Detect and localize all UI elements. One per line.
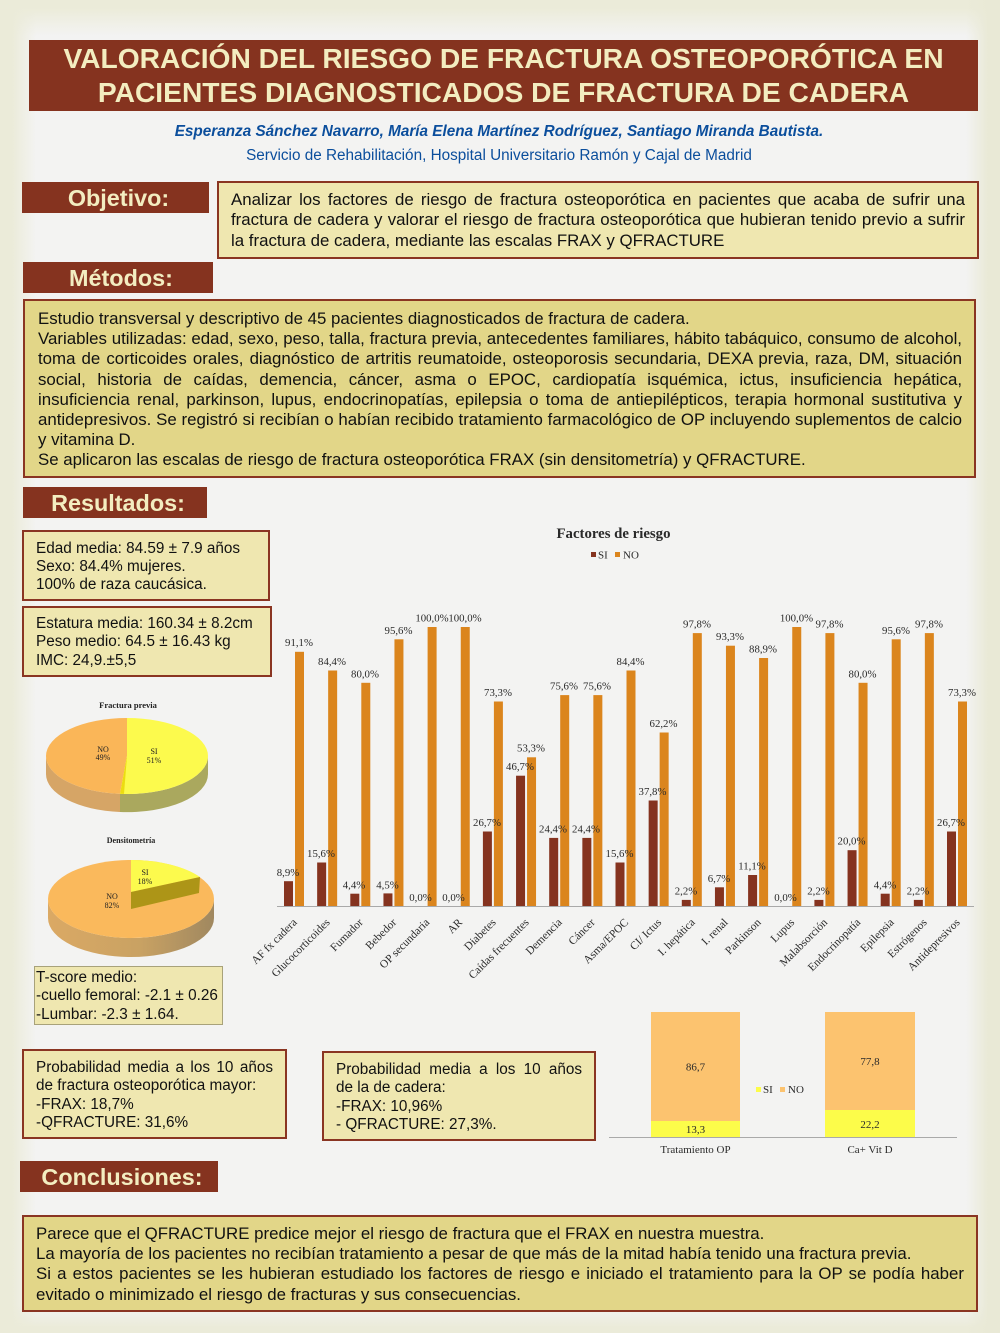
value labels NO: 95,6%: [385, 625, 412, 637]
category labels: [249, 916, 963, 982]
pie side: [48, 899, 214, 957]
stacked bar chart: tratamiento: [609, 1012, 957, 1156]
panel: probabilidad fractura cadera: de la de cadera:: [336, 1079, 446, 1096]
legend: NO: [788, 1084, 804, 1096]
panel: probabilidad fractura mayor: [22, 1049, 287, 1139]
pie chart: densitometría: [48, 836, 214, 957]
category labels: Asma/EPOC: [581, 917, 631, 966]
panel: métodos: insuficiencia renal, parkinson, lupus, endocrinopatías, epilepsia o toma de antiepilépticos, terapia hormonal sustitutiva y: [38, 390, 962, 409]
value labels NO: 97,8%: [915, 618, 943, 630]
panel: probabilidad fractura mayor: -QFRACTURE: 31,6%: [36, 1114, 188, 1131]
slice: SI: [120, 718, 208, 794]
pie labels: SI: [141, 868, 149, 877]
panel: probabilidad fractura mayor: de fractura osteoporótica mayor:: [36, 1077, 256, 1094]
value labels NO: 73,3%: [948, 687, 976, 699]
panel: edad y sexo: 100% de raza caucásica.: [36, 576, 207, 593]
panel: objetivo: Analizar los factores de riesgo de fractura osteoporótica en pacientes que acaba de sufrir una: [231, 190, 965, 209]
bars NO: [295, 627, 967, 906]
bars SI: [284, 776, 956, 906]
value labels SI: 24,4%: [572, 824, 600, 836]
value labels NO: 84,4%: [318, 656, 346, 668]
panel: estatura y peso: Peso medio: 64.5 ± 16.43 kg: [36, 633, 231, 650]
pie labels: 18%: [138, 877, 153, 886]
panel: t-score: T-score medio:: [36, 969, 137, 986]
category labels: Fumador: [328, 916, 366, 954]
pie title: Fractura previa: [99, 700, 158, 710]
panel: métodos: Se aplicaron las escalas de riesgo de fractura osteoporótica FRAX (sin densitometría) y QFRACTURE.: [38, 450, 806, 469]
category labels: Caídas frecuentes: [467, 917, 532, 982]
value labels NO: 80,0%: [351, 668, 379, 680]
value labels SI: 4,5%: [376, 880, 399, 892]
bar values: 13,3: [686, 1124, 706, 1136]
pie title: Densitometría: [107, 836, 155, 845]
value labels SI: 15,6%: [307, 848, 335, 860]
category labels: Cáncer: [567, 916, 598, 948]
category labels: Demencia: [524, 917, 565, 958]
slice: NO: [48, 860, 214, 938]
chart legend: SI: [598, 550, 608, 562]
value labels NO: 75,6%: [583, 680, 611, 692]
category labels: Bebedor: [364, 916, 399, 952]
panel: probabilidad fractura cadera: -FRAX: 10,96%: [336, 1098, 442, 1115]
value labels NO: 84,4%: [617, 656, 644, 668]
value labels NO: 91,1%: [285, 637, 313, 649]
legend: SI: [763, 1084, 773, 1096]
value labels SI: 4,4%: [343, 880, 365, 892]
bar values: 86,7: [686, 1062, 706, 1074]
panel: métodos: y vitamina D.: [38, 430, 135, 449]
heading: resultados: [23, 487, 207, 518]
category labels: AF fx cadera: [249, 917, 300, 967]
category labels: Parkinson: [723, 916, 764, 957]
value labels SI: 2,2%: [807, 886, 830, 898]
panel: conclusiones: Parece que el QFRACTURE predice mejor el riesgo de fractura que el FRAX en nuestra muestra.: [36, 1224, 764, 1243]
panel: métodos: [23, 299, 976, 478]
value labels NO: 88,9%: [749, 644, 777, 656]
value labels NO: 62,2%: [650, 718, 677, 730]
chart legend: [591, 550, 639, 562]
value labels SI: 24,4%: [539, 824, 567, 836]
category labels: I. hepática: [656, 917, 698, 958]
slice wall: [131, 877, 200, 909]
pie side: NO: [46, 756, 120, 812]
heading: conclusiones: [20, 1161, 218, 1192]
chart title: Factores de riesgo: [557, 526, 670, 542]
heading: resultados: Resultados:: [51, 490, 185, 516]
title: [29, 40, 978, 111]
axis: [609, 1136, 957, 1138]
panel: métodos: antidepresivos. Se registró si recibían o habían recibido tratamiento farmacológico de OP incluyendo suplementos de calcio: [38, 410, 962, 429]
value labels NO: 75,6%: [550, 680, 578, 692]
value labels NO: 80,0%: [849, 668, 876, 680]
category labels: Malabsorción: [778, 916, 830, 969]
panel: objetivo: fractura de cadera y valorar el riesgo de fractura osteoporótica que hubieran tenido previo a sufrir: [231, 210, 965, 229]
slice wall: [120, 756, 127, 794]
value labels SI: 11,1%: [738, 860, 766, 872]
pie labels: [105, 868, 153, 910]
value labels NO: 97,8%: [816, 618, 843, 630]
pie labels: SI: [150, 747, 158, 756]
panel: estatura y peso: Estatura media: 160.34 ± 8.2cm: [36, 615, 253, 632]
category labels: I. renal: [700, 917, 731, 948]
value labels SI: 26,7%: [473, 817, 501, 829]
chart legend: NO: [623, 550, 639, 562]
value labels NO: [285, 612, 976, 754]
panel: métodos: Estudio transversal y descriptivo de 45 pacientes diagnosticados de fractura de cadera.: [38, 309, 690, 328]
panel: probabilidad fractura mayor: -FRAX: 18,7%: [36, 1096, 134, 1113]
value labels NO: 100,0%: [415, 612, 449, 624]
pie labels: NO: [106, 892, 118, 901]
heading: conclusiones: Conclusiones:: [41, 1164, 203, 1190]
slice: SI: [131, 860, 200, 892]
pie labels: [96, 745, 162, 765]
category labels: Antidepresivos: [906, 917, 963, 973]
value labels NO: 73,3%: [484, 687, 512, 699]
value labels NO: 97,8%: [683, 618, 711, 630]
axis labels: Ca+ Vit D: [847, 1144, 893, 1156]
category labels: Epilepsia: [858, 917, 897, 955]
category labels: CI/ Ictus: [628, 917, 664, 953]
axis labels: [660, 1144, 893, 1156]
category labels: OP secundaria: [378, 917, 432, 971]
value labels SI: 46,7%: [506, 761, 534, 773]
pie side: SI: [120, 756, 208, 812]
affiliation: Servicio de Rehabilitación, Hospital Universitario Ramón y Cajal de Madrid: [246, 147, 752, 164]
panel: edad y sexo: Sexo: 84.4% mujeres.: [36, 558, 186, 575]
panel: conclusiones: La mayoría de los pacientes no recibían tratamiento a pesar de que más de la mitad había tenido una fractura previa.: [36, 1244, 911, 1263]
heading: objetivo: [22, 182, 209, 213]
panel: conclusiones: Si a estos pacientes se les hubieran estudiado los factores de riesgo e iniciado el tratamiento para la OP se podía haber: [36, 1264, 964, 1283]
category labels: AR: [446, 916, 465, 936]
bar values: [686, 1056, 880, 1136]
panel: t-score: -cuello femoral: -2.1 ± 0.26: [36, 987, 218, 1004]
value labels NO: 100,0%: [780, 612, 813, 624]
category labels: Estrógenos: [886, 917, 930, 961]
axis labels: Tratamiento OP: [660, 1144, 731, 1156]
panel: probabilidad fractura cadera: - QFRACTURE: 27,3%.: [336, 1116, 497, 1133]
panel: objetivo: la fractura de cadera, mediante las escalas FRAX y QFRACTURE: [231, 231, 724, 250]
value labels SI: 6,7%: [708, 873, 730, 885]
value labels SI: 2,2%: [675, 886, 697, 898]
pie chart: fractura previa: [46, 700, 208, 812]
legend: [756, 1084, 804, 1096]
value labels NO: 53,3%: [517, 742, 545, 754]
value labels NO: 95,6%: [882, 625, 910, 637]
panel: probabilidad fractura mayor: Probabilidad media a los 10 años: [36, 1059, 273, 1076]
value labels SI: 0,0%: [442, 892, 465, 904]
pie labels: 49%: [96, 753, 111, 762]
panel: edad y sexo: Edad media: 84.59 ± 7.9 años: [36, 540, 240, 557]
category labels: Diabetes: [462, 917, 499, 953]
value labels SI: 20,0%: [838, 836, 865, 848]
bar: tratamiento OP: [651, 1012, 740, 1137]
value labels SI: 0,0%: [409, 892, 432, 904]
heading: métodos: [23, 262, 213, 293]
bar chart: factores de riesgo: [249, 526, 976, 982]
value labels SI: 15,6%: [606, 848, 633, 860]
value labels SI: 8,9%: [277, 867, 299, 879]
pie labels: 82%: [105, 901, 120, 910]
panel: objetivo: [217, 181, 979, 259]
value labels SI: 26,7%: [937, 817, 965, 829]
bar values: 77,8: [860, 1056, 880, 1068]
panel: estatura y peso: IMC: 24,9.±5,5: [36, 652, 136, 669]
authors: Esperanza Sánchez Navarro, María Elena Martínez Rodríguez, Santiago Miranda Bautista.: [175, 123, 823, 140]
panel: t-score: [34, 966, 223, 1025]
panel: probabilidad fractura cadera: Probabilidad media a los 10 años: [336, 1061, 582, 1078]
value labels SI: 37,8%: [639, 786, 666, 798]
bar values: 22,2: [860, 1119, 880, 1131]
value labels SI: 0,0%: [774, 892, 797, 904]
category labels: Glucocorticoides: [270, 917, 333, 980]
panel: métodos: toma de corticoides orales, diagnóstico de artritis reumatoide, osteoporosis secundaria, DEXA previa, raza, DM, situación: [38, 349, 962, 368]
pie labels: NO: [97, 745, 109, 754]
title: VALORACIÓN DEL RIESGO DE FRACTURA OSTEOPORÓTICA EN: [63, 42, 944, 74]
value labels NO: 93,3%: [716, 631, 744, 643]
panel: conclusiones: evitado o minimizado el riesgo de fracturas y sus consecuencias.: [36, 1285, 521, 1304]
panel: métodos: social, historia de caídas, demencia, cáncer, asma o EPOC, cardiopatía isquémica, ictus, insuficiencia hepática,: [38, 370, 962, 389]
value labels NO: 100,0%: [448, 612, 482, 624]
heading: objetivo: Objetivo:: [68, 185, 169, 211]
title: PACIENTES DIAGNOSTICADOS DE FRACTURA DE CADERA: [98, 76, 909, 108]
category labels: Lupus: [769, 917, 797, 945]
bar: Ca + Vit D: [825, 1012, 915, 1137]
panel: t-score: -Lumbar: -2.3 ± 1.64.: [36, 1006, 179, 1023]
panel: edad y sexo: [22, 530, 270, 601]
value labels SI: [277, 761, 965, 904]
slice: NO: [46, 718, 127, 794]
panel: conclusiones: [22, 1215, 978, 1312]
panel: estatura y peso: [22, 606, 272, 677]
panel: probabilidad fractura cadera: [322, 1051, 596, 1141]
category labels: Endocrinopatía: [806, 917, 863, 974]
value labels SI: 4,4%: [874, 880, 896, 892]
value labels SI: 2,2%: [907, 886, 929, 898]
pie labels: 51%: [147, 756, 162, 765]
heading: métodos: Métodos:: [69, 265, 173, 291]
axis: [277, 906, 974, 908]
panel: métodos: Variables utilizadas: edad, sexo, peso, talla, fractura previa, antecedentes familiares, hábito tabáquico, consumo de alcohol,: [38, 329, 962, 348]
